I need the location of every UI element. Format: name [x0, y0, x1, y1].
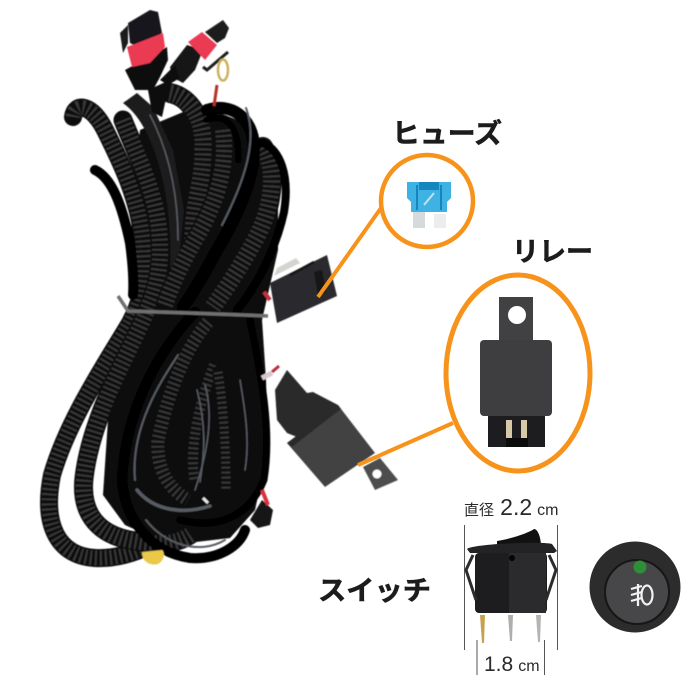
- indicator: green lamp: [634, 560, 646, 574]
- rocker switch front view: [590, 542, 680, 632]
- icon: relay: [480, 297, 552, 447]
- fuse callout: [381, 155, 473, 247]
- relay callout line: [358, 423, 453, 465]
- corrugated outer left loop: [49, 108, 150, 558]
- relay on harness: [262, 366, 398, 490]
- relay callout: [446, 275, 590, 471]
- photo: wiring harness: [49, 10, 398, 564]
- heading: switch: スイッチ: [318, 576, 431, 606]
- fuse callout line: [318, 208, 381, 297]
- heading: fuse: ヒューズ: [392, 118, 502, 149]
- width label: 1.8 cm: [484, 653, 540, 676]
- smooth glossy cables: [95, 93, 286, 558]
- corrugated centre cables: [158, 93, 272, 500]
- diameter label: 直径 2.2 cm: [464, 494, 558, 520]
- icon: blue fuse: [407, 182, 451, 228]
- heading: relay: リレー: [512, 237, 593, 267]
- harness dark core: [103, 105, 278, 545]
- dimension lines: [464, 525, 558, 675]
- icon: fog light symbol: [631, 584, 652, 606]
- rocker switch side view: [466, 529, 557, 643]
- top connectors: [120, 10, 229, 117]
- fuse holder on harness: [264, 255, 337, 323]
- bottom details: [142, 490, 273, 564]
- corrugated inner left loop: [83, 120, 190, 543]
- zip tie: [118, 296, 268, 316]
